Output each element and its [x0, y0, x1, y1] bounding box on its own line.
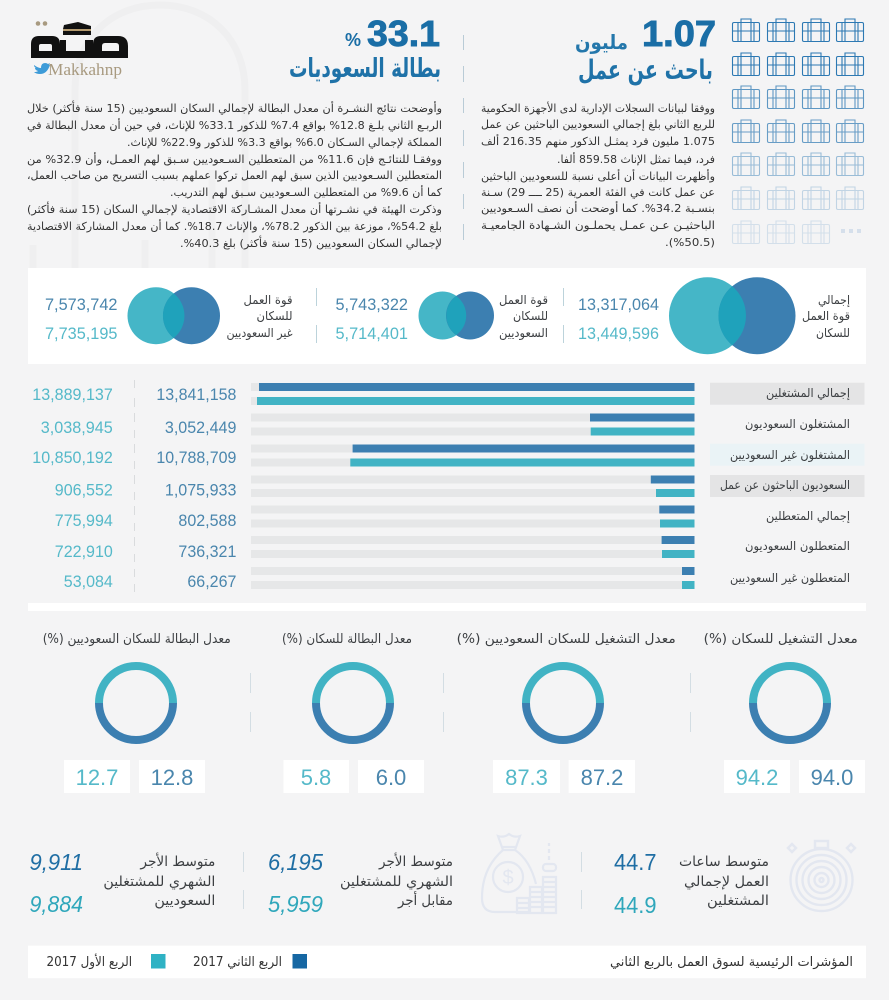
text block: unemployment: لإجمالي السكان السعوديين (15 سنة فأكثر) بلغ 40.3‏%. — [180, 235, 442, 250]
label: Saudi labour force: قوة العمل — [499, 293, 548, 308]
panel: employment rate of Saudis — [457, 632, 676, 793]
values: Saudi labour force: 5,743,322 — [336, 295, 408, 314]
row: total employed: 13,889,137 — [32, 385, 113, 404]
row: Saudi employed: المشتغلون السعوديون — [745, 417, 850, 432]
text block: job seekers: بنسـبة 34.2‏%. كما أوضحت أن نصف السـعوديين — [481, 201, 715, 215]
icon: bird — [34, 63, 50, 74]
ring chart — [99, 666, 173, 740]
values — [30, 849, 83, 917]
value Q1: 12.7 — [76, 765, 118, 790]
label — [340, 852, 453, 909]
values: 9,884 — [30, 891, 83, 917]
label — [679, 854, 769, 909]
row: Saudi employed: 3,038,945 — [41, 418, 113, 437]
values: Saudi labour force: 5,714,401 — [336, 324, 408, 343]
value Q2: 94.0 — [811, 765, 853, 790]
text block: job seekers: الباحثيـن عـن عمـل يحملـون الشـهادة الجامعيـة — [481, 219, 715, 232]
label: متوسط الأجر — [378, 852, 453, 870]
row: total employed: إجمالي المشتغلين — [766, 386, 850, 401]
label: total labour force: للسكان — [816, 326, 850, 340]
million word: مليون — [575, 30, 628, 54]
footer legend — [28, 946, 866, 978]
label: non-Saudi labour force: للسكان — [256, 309, 292, 323]
row: total unemployed: 775,994 — [55, 511, 113, 530]
row: non-Saudi employed: 10,850,192 — [32, 448, 113, 467]
panel: unemployment rate of Saudis — [43, 632, 231, 793]
values: non-Saudi labour force — [45, 295, 118, 343]
values: total labour force: 13,317,064 — [578, 295, 659, 314]
text block: job seekers: ووفقا لبيانات السجلات الإدارية لدى الأجهزة الحكومية — [481, 101, 715, 115]
venn: total labour force — [669, 277, 796, 354]
heading: معدل البطالة للسكان (%) — [282, 632, 412, 647]
venn: non-Saudi labour force — [128, 287, 220, 344]
text block: job seekers: عن عمل كانت في الفئة العمرية (25 ــــ 29) سـنة — [481, 186, 715, 199]
row: Saudi job seekers: 1,075,933 — [165, 480, 236, 500]
row: non-Saudi unemployed: 66,267 — [187, 572, 236, 591]
value Q2 — [139, 760, 205, 793]
label: total labour force: قوة العمل — [802, 309, 850, 324]
metric: working hours — [614, 849, 769, 918]
headline: job seekers — [575, 13, 716, 86]
row: Saudi unemployed: 722,910 — [55, 542, 113, 561]
headline: unemployment of Saudi women — [289, 13, 441, 84]
label: العمل لإجمالي — [684, 874, 769, 890]
text block: job seekers: للربع الثاني بلغ إجمالي السعوديين الباحثين عن عمل — [481, 118, 715, 131]
footer title: المؤشرات الرئيسية لسوق العمل بالربع الثاني — [610, 955, 853, 970]
row: Saudi unemployed: 736,321 — [178, 542, 236, 561]
row: Saudi unemployed: المتعطلون السعوديون — [745, 539, 850, 554]
value Q1 — [493, 760, 560, 793]
value Q1: 87.3 — [505, 765, 548, 790]
row: non-Saudi employed — [32, 444, 865, 467]
legend: second quarter: الربع الثاني 2017 — [193, 955, 282, 970]
value Q2: 87.2 — [581, 765, 623, 790]
values: 5,959 — [268, 891, 323, 917]
value Q1: 94.2 — [736, 765, 778, 790]
row: total unemployed: إجمالي المتعطلين — [766, 509, 850, 524]
icon grid: briefcases — [732, 19, 864, 244]
panel: employment rate of population — [704, 632, 865, 793]
text block: job seekers: 1.075 مليون فرد يمثـل الذكور منهم 216.35 ألف — [481, 134, 715, 148]
values: 44.7 — [614, 849, 656, 875]
panel: unemployment rate of population — [282, 632, 424, 793]
value Q1 — [724, 760, 790, 793]
icon: stopwatch — [788, 841, 855, 911]
label: total labour force — [802, 293, 850, 340]
label: المشتغلين — [707, 893, 769, 909]
icon: Makkah logo — [31, 21, 128, 79]
row: Saudi job seekers — [55, 475, 865, 500]
label — [103, 852, 215, 909]
label: non-Saudi labour force — [226, 293, 292, 341]
label: Saudi labour force — [499, 293, 548, 341]
row: Saudi employed: 3,052,449 — [165, 418, 236, 437]
heading: معدل البطالة للسكان السعوديين (%) — [43, 632, 231, 647]
text block: unemployment: المتعطلين السـعوديين الذين سبق لهم العمل تركوا عملهم بسبب التسريح من صاحب العمل، — [27, 169, 442, 183]
heading: معدل التشغيل للسكان السعوديين (%) — [457, 632, 676, 647]
row: total employed — [32, 383, 865, 405]
figure 1.07: 1.07 — [642, 13, 716, 54]
percent sign: % — [345, 30, 361, 50]
text block: unemployment: ووفقـا للنتائـج فإن 11.6‏% من المتعطلين السـعوديين سـبق لهم العمـل، وأن 32.9‏% من — [27, 152, 442, 167]
watermark — [33, 5, 245, 268]
label: total labour force: إجمالي — [818, 293, 850, 307]
handle: Makkahnp — [48, 60, 122, 79]
row: total unemployed: 802,588 — [178, 511, 236, 530]
value Q2 — [569, 760, 635, 793]
ring chart — [526, 666, 600, 740]
text block: job seekers — [481, 101, 715, 249]
value Q2 — [358, 760, 424, 793]
heading: معدل التشغيل للسكان (%) — [704, 632, 858, 647]
label: متوسط ساعات — [679, 854, 769, 870]
label: السعوديين — [154, 893, 215, 909]
values: 44.9 — [614, 892, 656, 918]
row: non-Saudi unemployed — [64, 567, 850, 591]
metric: monthly wage — [268, 849, 453, 917]
value Q2: 6.0 — [376, 765, 406, 790]
legend: first quarter — [46, 953, 166, 970]
values: total labour force — [578, 295, 659, 343]
values: Saudi labour force — [336, 295, 408, 343]
divider column header — [463, 35, 464, 240]
label: الشهري للمشتغلين — [103, 874, 215, 890]
label: non-Saudi labour force: غير السعوديين — [226, 326, 292, 341]
text block: unemployment: الربـع الثاني بلـغ 12.8‏% بواقع 7.4‏% للذكور 33.1‏% للإناث، في حين أن معدل البطالة في — [27, 118, 442, 132]
row: total unemployed — [55, 506, 850, 530]
row: non-Saudi unemployed: المتعطلون غير السعوديين — [730, 571, 850, 586]
label: Saudi labour force: للسكان — [513, 309, 548, 323]
value Q1: 5.8 — [301, 765, 331, 790]
label: non-Saudi labour force: قوة العمل — [244, 293, 292, 308]
values — [268, 849, 323, 917]
unemployment heading: بطالة السعوديات — [289, 54, 441, 84]
value Q2: 12.8 — [151, 765, 193, 790]
text block: unemployment: وأوضحت نتائج النشـرة أن معدل البطالة لإجمالي السكان السعوديين (15 سنة فأكثر) خلال — [27, 100, 442, 115]
metric: monthly wage of Saudis — [30, 849, 215, 917]
job seekers heading: باحث عن عمل — [578, 55, 713, 86]
row: non-Saudi employed: 10,788,709 — [156, 448, 236, 467]
ring chart — [316, 666, 390, 740]
panel: labour force — [28, 268, 866, 364]
row: Saudi job seekers: السعوديون الباحثون عن عمل — [720, 478, 850, 493]
venn: Saudi labour force — [418, 292, 494, 340]
text block: unemployment: وذكرت الهيئة في نشـرتها أن معدل المشـاركة الاقتصادية لإجمالي السكان (15 سنة فأكثر) — [27, 201, 442, 216]
text block: job seekers: (50.5‏%). — [665, 236, 715, 249]
text block: unemployment — [27, 100, 443, 250]
values — [614, 849, 656, 918]
values: 6,195 — [268, 849, 323, 875]
row: non-Saudi unemployed: 53,084 — [64, 572, 113, 591]
row: Saudi employed — [41, 414, 850, 437]
row: Saudi unemployed — [55, 536, 850, 561]
label: Saudi labour force: السعوديين — [499, 326, 548, 341]
row: Saudi job seekers: 906,552 — [55, 480, 113, 500]
value Q1 — [64, 760, 130, 793]
values: non-Saudi labour force: 7,735,195 — [45, 324, 118, 343]
value Q1 — [284, 760, 349, 793]
legend: first quarter: الربع الأول 2017 — [46, 953, 132, 970]
value Q2 — [799, 760, 865, 793]
row: non-Saudi employed: المشتغلون غير السعوديين — [730, 448, 850, 463]
values: total labour force: 13,449,596 — [578, 324, 659, 343]
row: total employed: 13,841,158 — [156, 385, 236, 404]
text block: job seekers: وأظهرت البيانات أن أعلى نسبة للسعوديين الباحثين — [481, 169, 715, 183]
label: متوسط الأجر — [139, 852, 215, 870]
figure 33.1: 33.1 — [367, 13, 440, 54]
bar chart: employment and unemployment — [32, 383, 865, 591]
label: الشهري للمشتغلين — [340, 874, 453, 890]
text block: job seekers: فرد، فيما تمثل الإناث 859.58 ألفا. — [557, 152, 715, 166]
text block: unemployment: بلغ 54.2‏%، موزعة بين الذكور 78.2‏%، والإناث 18.7‏%. كما أن معدل المشاركة الاقتصادية — [27, 219, 442, 233]
label: مقابل أجر — [397, 891, 453, 909]
text block: unemployment: المملكة لإجمالي السـكان 6.0‏% بواقع 3.3‏% للذكور و22.9‏% للإناث. — [127, 136, 442, 149]
values: non-Saudi labour force: 7,573,742 — [45, 295, 118, 314]
text block: unemployment: كما أن 9.6‏% من المتعطلين السـعوديين سـبق لهم التدريب. — [170, 185, 443, 200]
icon: money bag — [482, 834, 556, 913]
ring chart — [753, 666, 827, 740]
icon: money bag: $ — [502, 867, 514, 889]
values: 9,911 — [30, 849, 83, 875]
